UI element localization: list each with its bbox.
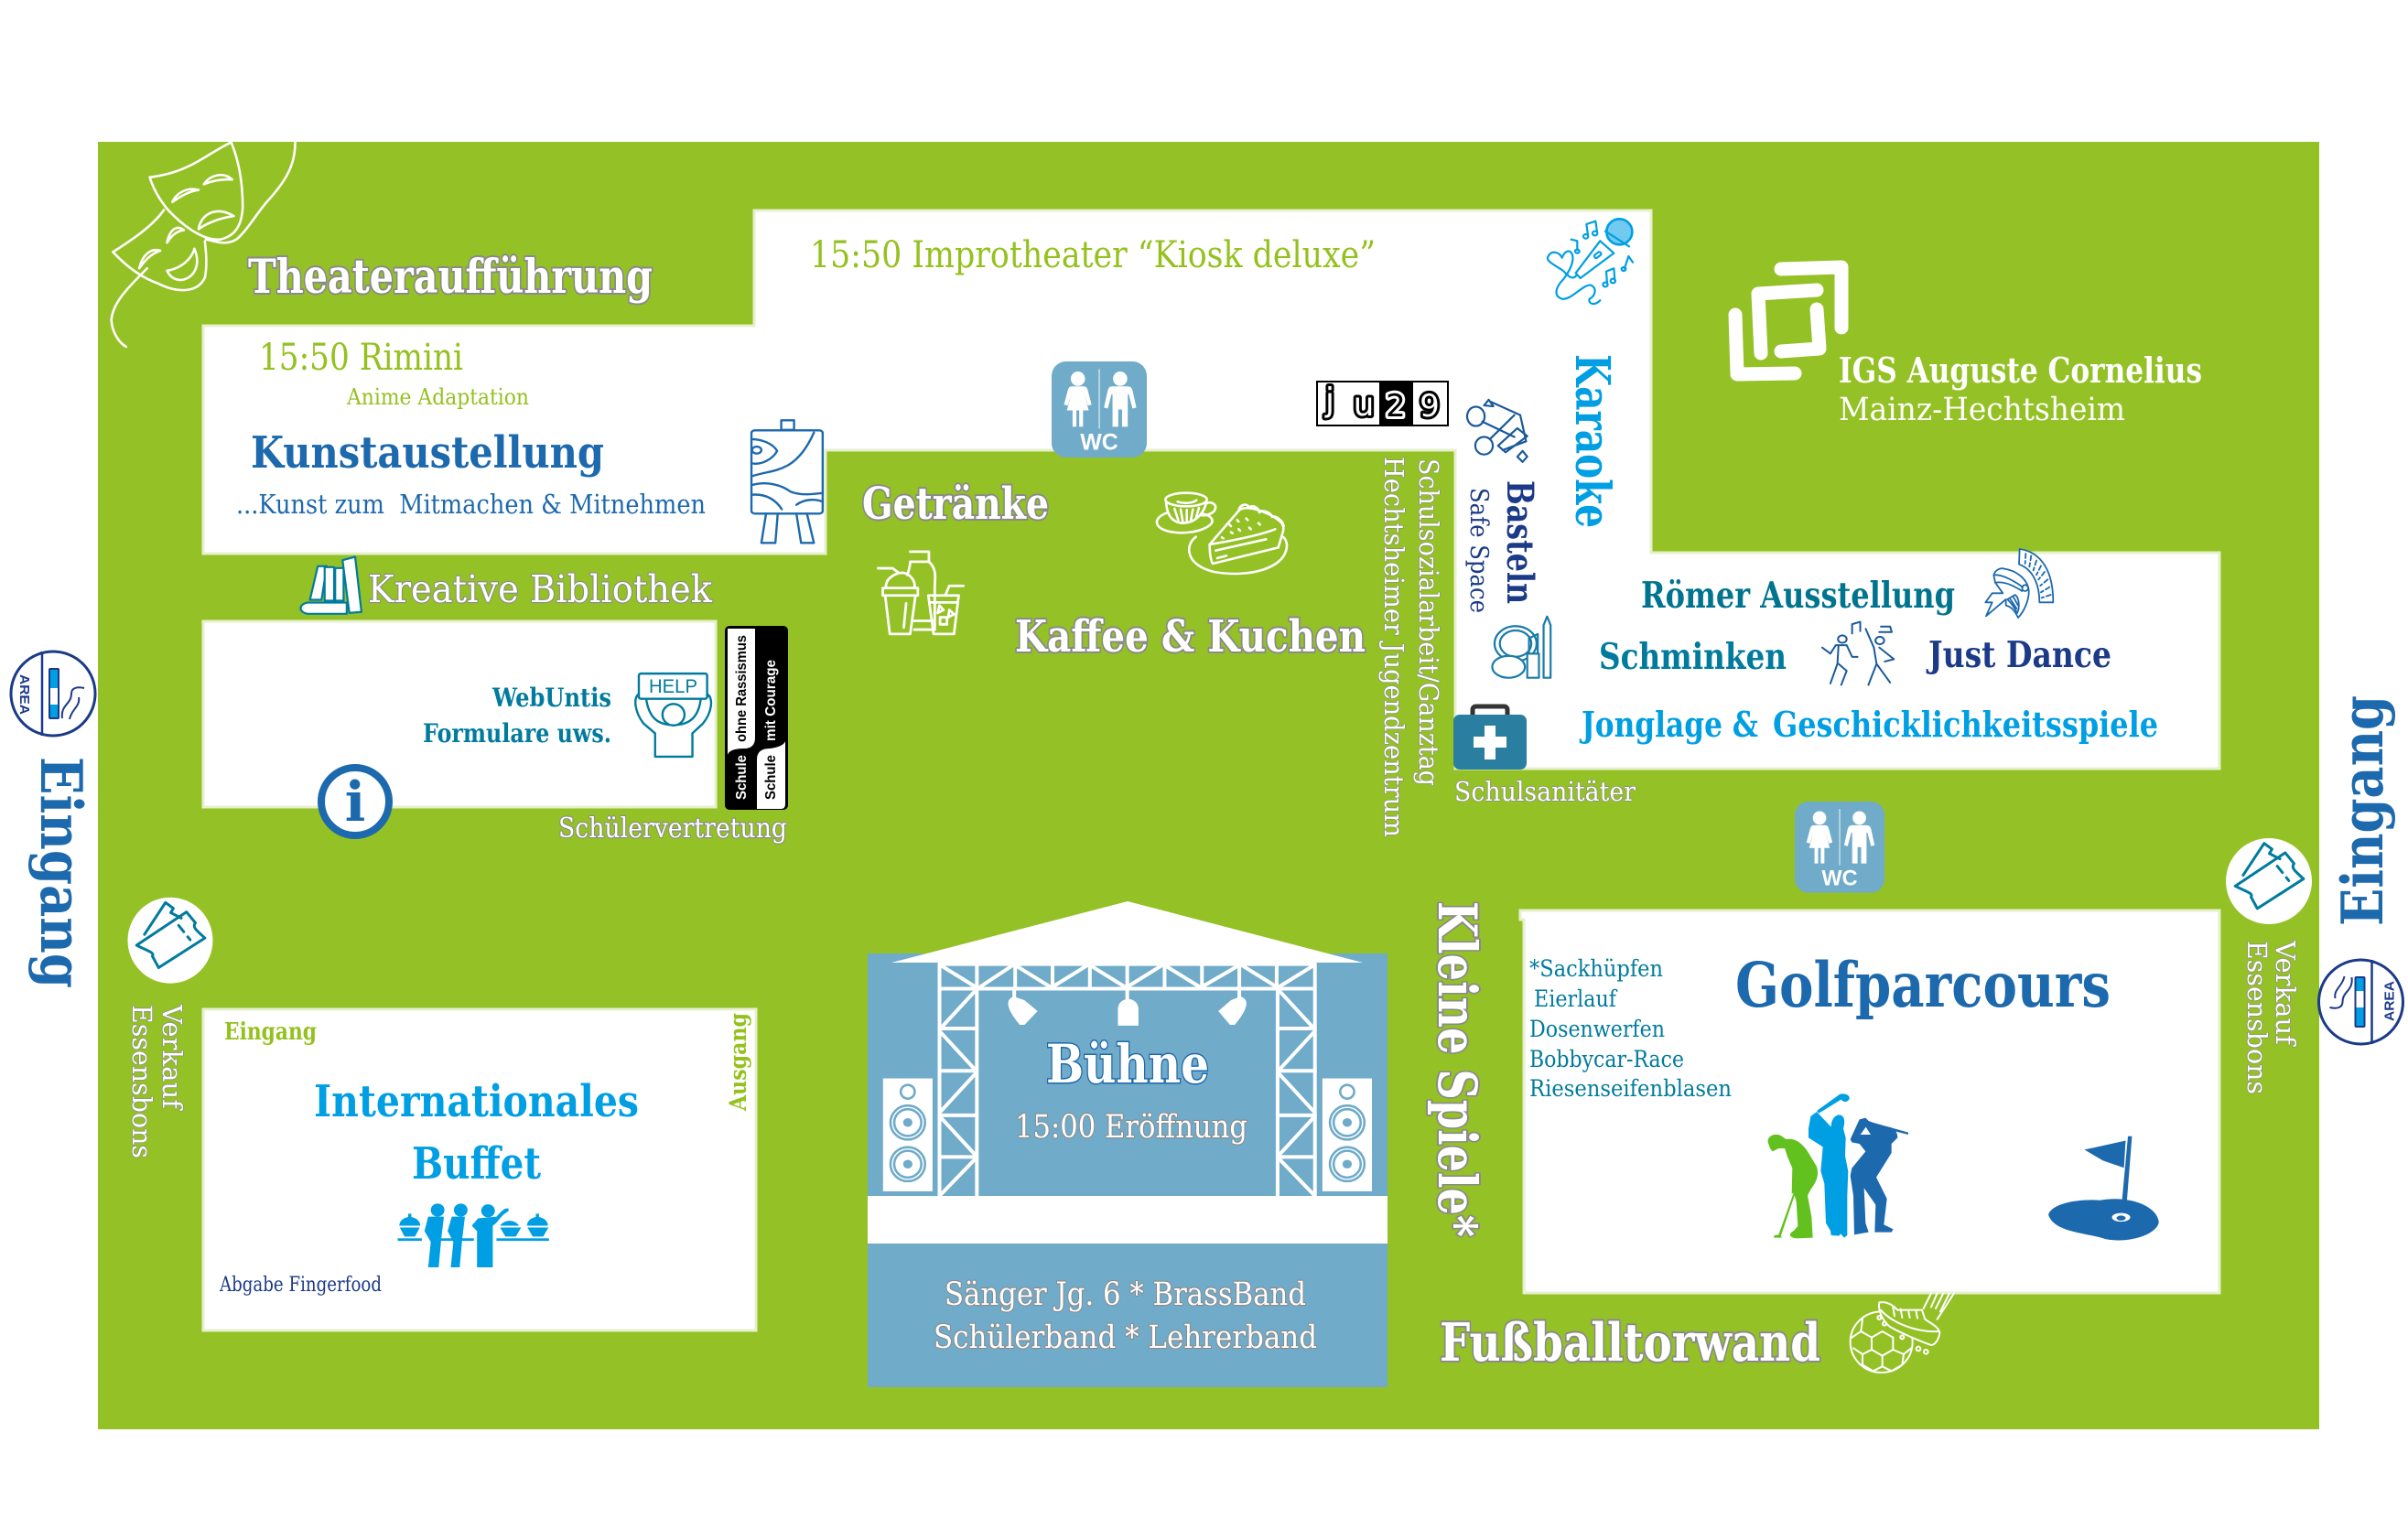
panel: main building [203, 210, 2219, 769]
text: Sänger BrassBand: Sänger Jg. 6 * BrassBand [945, 1276, 1306, 1313]
text: Mainz-Hechtsheim: Mainz-Hechtsheim [1839, 392, 2125, 428]
icon: drinks [878, 552, 964, 634]
panel: stage [868, 901, 1388, 1387]
icon: buffet people [398, 1203, 549, 1267]
heading: Eingang right: Eingang [2328, 695, 2396, 926]
text: Schulsanitäter: Schulsanitäter [1454, 776, 1636, 807]
text: Just Dance: Just Dance [1926, 634, 2111, 676]
heading: Fußballtorwand: Fußballtorwand [1440, 1312, 1820, 1373]
text: HELP: HELP [649, 676, 697, 697]
icon: dancers [1822, 622, 1894, 684]
golfer follow through [1851, 1118, 1908, 1234]
panel: golf [1520, 910, 2219, 1293]
heading: Kaffee & Kuchen: Kaffee & Kuchen [1015, 611, 1366, 662]
green grounds [98, 142, 2319, 1429]
text: Hechtsheimer Jugendzentrum: Hechtsheimer Jugendzentrum [1378, 457, 1409, 837]
icon: crafting scissors [1467, 400, 1528, 462]
text: Sackhüpfen: *Sackhüpfen [1529, 955, 1663, 982]
text: Jonglage: Jonglage & [1580, 704, 1758, 745]
games list [1529, 955, 1732, 1102]
icon: karaoke microphone [1548, 219, 1633, 304]
text: Abgabe Fingerfood: Abgabe Fingerfood [219, 1274, 382, 1297]
heading: Getränke: Getränke [862, 479, 1049, 530]
icon: theatre masks [112, 141, 296, 347]
text: Riesenseifenblasen: Riesenseifenblasen [1529, 1075, 1732, 1102]
text: Verkauf left: Verkauf [157, 1004, 188, 1111]
icon: golf flag [2048, 1136, 2159, 1240]
text: Verkauf right: Verkauf [2270, 940, 2301, 1047]
badge: Schule ohne Rassismus: Schule [734, 755, 750, 800]
heading: Buffet: Buffet [412, 1138, 541, 1190]
text: 15:50 Rimini: 15:50 Rimini [259, 337, 463, 379]
logo: ju29: j [1324, 382, 1334, 419]
logo: ju29 [1317, 382, 1448, 425]
icon: smoking area left [11, 652, 95, 736]
text: Eingang buffet: Eingang [224, 1018, 317, 1046]
text: Schülervertretung: Schülervertretung [558, 813, 787, 845]
icon: WC lower: WC [1821, 867, 1858, 891]
heading: Kunstaustellung: Kunstaustellung [251, 427, 604, 479]
stage truss [940, 964, 1315, 1196]
text: Improtheater: 15:50 Improtheater “Kiosk deluxe” [810, 234, 1376, 276]
text: Eierlauf: Eierlauf [1534, 985, 1618, 1012]
text: Schminken: Schminken [1599, 636, 1787, 678]
text: Geschicklichkeitsspiele: Geschicklichkeitsspiele [1773, 704, 2158, 745]
heading: Kleine Spiele: Kleine Spiele* [1426, 901, 1488, 1237]
panel: information [203, 621, 716, 807]
text: Anime Adaptation: Anime Adaptation [346, 384, 529, 410]
text: Schülerband Lehrerband: Schülerband * Lehrerband [934, 1319, 1317, 1356]
panel: buffet [203, 1009, 756, 1330]
text: Ausgang buffet: Ausgang [725, 1013, 751, 1112]
icon: make-up [1492, 617, 1550, 678]
icon: smoking area right [2319, 960, 2403, 1044]
heading: Bühne: Bühne [1046, 1033, 1209, 1095]
icon: roman helmet [1985, 549, 2053, 618]
icon: smoking area left: AREA [16, 674, 32, 715]
heading: Internationales: Internationales [314, 1076, 639, 1127]
logo: ju29: u [1354, 386, 1374, 424]
icon: WC upper: WC [1080, 429, 1118, 456]
badge: Schule ohne Rassismus [725, 626, 788, 810]
icon: ticket right [2226, 838, 2312, 924]
icon: first aid kit [1453, 706, 1527, 770]
badge: Schule ohne Rassismus: ohne Rassismus [734, 635, 750, 742]
icon: WC lower [1795, 802, 1884, 893]
badge: Schule ohne Rassismus: Schule [763, 755, 779, 800]
icon: easel painting [751, 420, 823, 543]
heading: Karaoke: Karaoke [1564, 354, 1620, 528]
icon: books [300, 557, 362, 614]
stage lights [1008, 996, 1247, 1026]
speaker right [1323, 1079, 1372, 1191]
heading: Golfparcours: Golfparcours [1735, 949, 2111, 1021]
icon: smoking area right: AREA [2381, 981, 2398, 1021]
icon: football and boot [1851, 1293, 1954, 1373]
heading: Theateraufführung: Theateraufführung [248, 250, 653, 305]
text: IGS Auguste Cornelius: IGS Auguste Cornelius [1839, 350, 2202, 391]
text: Schulsozialarbeit/Ganztag: Schulsozialarbeit/Ganztag [1413, 458, 1444, 786]
text: Essensbons left: Essensbons [126, 1005, 157, 1158]
text: Bobbycar-Race: Bobbycar-Race [1529, 1046, 1684, 1072]
text: Safe Space: Safe Space [1464, 488, 1493, 613]
text: Römer Ausstellung: Römer Ausstellung [1641, 575, 1955, 617]
icon: information circle: i [345, 770, 365, 835]
icon: information circle [321, 768, 389, 835]
text: Essensbons right: Essensbons [2241, 941, 2273, 1094]
text: WebUntis: WebUntis [491, 683, 611, 713]
badge: Schule ohne Rassismus: mit Courage [763, 660, 779, 741]
icon: coffee and cake [1157, 493, 1287, 574]
speaker left [883, 1079, 933, 1191]
logo: IGS mark [1735, 267, 1841, 374]
heading: Basteln: Basteln [1498, 480, 1541, 604]
logo: ju29: 2 [1386, 388, 1406, 425]
golfer putting [1768, 1135, 1818, 1238]
heading: Kreative Bibliothek: Kreative Bibliothek [368, 567, 713, 611]
text: Dosenwerfen: Dosenwerfen [1529, 1016, 1665, 1042]
icon: golfers [1768, 1093, 1908, 1238]
text: Formulare uws.: Formulare uws. [423, 718, 611, 748]
icon: help sign [635, 673, 711, 757]
icon: WC upper [1052, 361, 1147, 458]
icon: ticket left [128, 898, 212, 984]
heading: Eingang left: Eingang [27, 757, 95, 988]
logo: ju29: 9 [1420, 388, 1440, 425]
text: Kunst zum Mitmachen: ...Kunst zum Mitmachen & Mitnehmen [236, 489, 706, 520]
golfer backswing [1809, 1093, 1850, 1238]
text: 15:00 Eröffnung: 15:00 Eröffnung [1015, 1109, 1247, 1146]
